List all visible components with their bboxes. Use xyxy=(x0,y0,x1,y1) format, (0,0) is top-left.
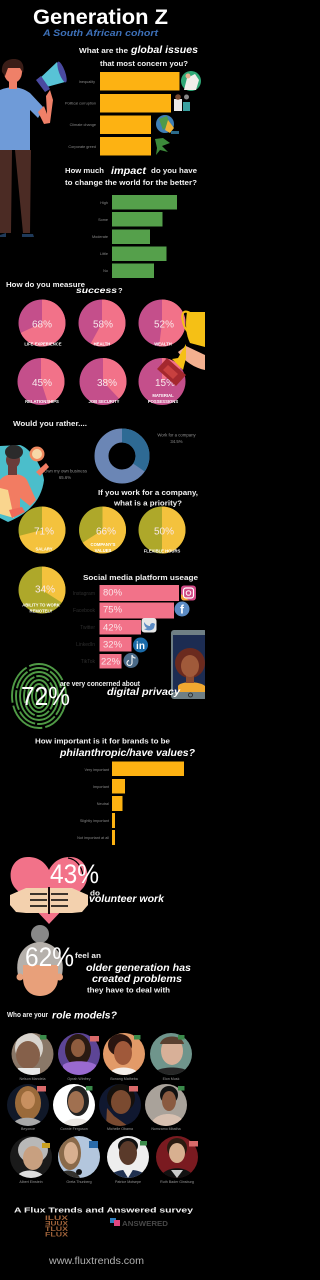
icon: tiktok xyxy=(124,653,138,668)
donut chart: work preference: 34.5% xyxy=(170,439,183,444)
bar chart: social media: Instagram xyxy=(73,591,95,597)
portrait: Ruth Bader Ginsburg xyxy=(156,1136,198,1184)
bar chart: social media: TikTok xyxy=(81,659,95,665)
logo: flux: ILUX xyxy=(45,1216,68,1222)
stat: volunteer work: volunteer work xyxy=(89,894,164,905)
bar chart: brand values: Not important at all xyxy=(77,836,109,840)
pie: company's values: VALUES xyxy=(95,548,112,553)
pie: life experience: 68% xyxy=(32,320,52,330)
pie: ability to work remotely xyxy=(18,566,66,614)
portrait: Nomzamo Mbatha xyxy=(145,1084,187,1131)
illustration: trophy and hand xyxy=(157,312,205,386)
illustration: phone with woman xyxy=(171,630,207,699)
icon: linkedin xyxy=(133,638,148,652)
pie: wealth: 52% xyxy=(154,320,174,330)
portrait: Bonang Matheba xyxy=(103,1033,145,1081)
portrait: Greta Thunberg: Greta Thunberg xyxy=(66,1180,92,1184)
pie: wealth xyxy=(138,299,186,346)
bar chart: global issues: Corporate greed xyxy=(68,145,96,149)
stat: volunteer work: do xyxy=(90,888,100,898)
heading: company priority xyxy=(98,488,198,508)
bar chart: social media xyxy=(73,585,179,668)
icon: facebook: f xyxy=(180,602,185,616)
heading: success: success xyxy=(76,285,117,295)
stat: digital privacy: 72% xyxy=(21,681,70,711)
pie: material possessions: 15% xyxy=(155,378,175,389)
bar chart: social media: Twitter xyxy=(80,625,95,631)
bar chart: global issues: Climate change xyxy=(70,123,96,127)
subtitle: A South African cohort xyxy=(42,28,159,39)
heading: role models xyxy=(7,1010,117,1022)
bar chart: impact: High xyxy=(100,201,108,205)
heading: global issues: that most concern you? xyxy=(100,59,188,68)
pie: ability to work remotely: ABILITY TO WORK xyxy=(22,602,60,608)
heading: role models: role models? xyxy=(52,1010,117,1022)
bar chart: social media: Facebook xyxy=(73,608,95,614)
bar chart: brand values: Neutral xyxy=(97,802,109,806)
pie: relationships: RELATIONSHIPS xyxy=(25,399,59,404)
illustration: woman at laptop xyxy=(0,445,49,522)
portrait: Elon Musk xyxy=(150,1033,192,1081)
stat: digital privacy xyxy=(21,679,180,711)
heading: global issues: What are the xyxy=(79,46,128,55)
bar chart: social media: LinkedIn xyxy=(76,642,95,648)
stat: volunteer work xyxy=(50,859,164,905)
pie: salary: 71% xyxy=(34,526,54,538)
donut chart: work preference: Own my own business xyxy=(44,468,87,474)
stat: older generation: they have to deal with xyxy=(87,986,170,994)
heading: impact xyxy=(65,166,197,187)
portrait: Connie Ferguson: Connie Ferguson xyxy=(60,1127,88,1131)
pie: ability to work remotely: REMOTELY xyxy=(30,608,53,614)
pie: health: 58% xyxy=(93,320,113,330)
bar chart: global issues: Inequality xyxy=(79,80,95,84)
heading: philanthropic brands: philanthropic/have values? xyxy=(59,748,195,759)
heading: impact: do you have xyxy=(151,166,197,175)
bar chart: social media: 75% xyxy=(103,604,123,616)
pie: ability to work remotely: 34% xyxy=(35,584,55,596)
portrait: Nelson Mandela: Nelson Mandela xyxy=(20,1077,45,1081)
illustration: heart and hands xyxy=(10,857,88,924)
heading: global issues xyxy=(79,45,198,68)
icon: instagram xyxy=(181,586,196,600)
donut chart: work preference xyxy=(44,432,197,480)
icon: linkedin: in xyxy=(136,641,145,652)
pie: material possessions: POSSESSIONS xyxy=(148,399,178,404)
pie: health xyxy=(78,300,126,346)
heading: impact: impact xyxy=(111,166,147,177)
portrait: Beyonce: Beyonce xyxy=(21,1127,35,1131)
pie: flexible hours: FLEXIBLE HOURS xyxy=(144,548,180,554)
pie: relationships xyxy=(18,358,64,405)
bar chart: brand values: Very important xyxy=(85,768,110,772)
heading: company priority: If you work for a company, xyxy=(98,488,198,497)
pie: material possessions xyxy=(138,358,186,405)
heading: philanthropic brands: How important is it for brands to be xyxy=(35,736,170,746)
heading: success: How do you measure xyxy=(6,280,85,289)
bar chart: impact: Little xyxy=(100,252,108,256)
portrait: Michelle Obama xyxy=(99,1084,141,1131)
stat: older generation xyxy=(25,942,191,994)
icons: global issues xyxy=(155,71,201,155)
heading: impact: How much xyxy=(65,166,104,175)
pie: flexible hours xyxy=(138,506,186,554)
heading: success xyxy=(6,280,123,295)
portrait: Oprah Winfrey: Oprah Winfrey xyxy=(67,1077,91,1081)
stat: digital privacy: digital privacy xyxy=(107,687,180,698)
pie: salary xyxy=(18,506,66,554)
stat: older generation: 62% xyxy=(25,942,74,972)
stat: older generation: feel an xyxy=(75,951,101,960)
bar chart: social media: 42% xyxy=(103,622,123,634)
stat: digital privacy: are very concerned about xyxy=(60,679,140,688)
portrait: Nomzamo Mbatha: Nomzamo Mbatha xyxy=(151,1127,181,1131)
logo: flux: ƎUUX xyxy=(45,1222,68,1228)
portrait: Albert Einstein xyxy=(10,1136,52,1184)
stat: older generation: older generation has xyxy=(86,963,191,974)
pie: job security xyxy=(80,358,127,405)
portrait: Greta Thunberg xyxy=(58,1136,100,1184)
bar chart: impact: No xyxy=(103,269,108,273)
bar chart: impact: Moderate xyxy=(92,235,108,239)
illustration: older woman xyxy=(16,925,63,996)
pie: wealth: WEALTH xyxy=(154,342,172,346)
heading: global issues: global issues xyxy=(130,45,198,56)
pie: company's values: COMPANY'S xyxy=(91,542,116,547)
bar chart: impact xyxy=(92,195,177,278)
bar chart: impact: Some xyxy=(98,218,108,222)
pie: company's values xyxy=(79,506,126,554)
icon: facebook xyxy=(174,602,190,616)
logo: answered xyxy=(110,1218,169,1228)
portrait: Bonang Matheba: Bonang Matheba xyxy=(110,1077,138,1081)
logo: flux: FLUX xyxy=(45,1232,68,1238)
portrait: Patrice Motsepe xyxy=(107,1136,149,1184)
portrait: Oprah Winfrey xyxy=(58,1033,100,1081)
pie: job security: JOB SECURITY xyxy=(89,399,120,404)
pie: health: HEALTH xyxy=(94,342,110,346)
bar chart: social media: 80% xyxy=(103,588,123,598)
portrait: Beyonce xyxy=(7,1084,49,1131)
stat: older generation: created problems xyxy=(92,974,182,985)
pie: relationships: 45% xyxy=(32,378,52,389)
heading: would you rather: Would you rather.... xyxy=(13,419,87,428)
pie: material possessions: MATERIAL xyxy=(152,393,174,398)
portrait: Elon Musk: Elon Musk xyxy=(163,1077,180,1081)
website link: www.fluxtrends.com xyxy=(48,1256,144,1267)
illustration: person with megaphone xyxy=(0,59,69,237)
bar chart: global issues: Political corruption xyxy=(65,102,96,106)
heading: social media: Social media platform useage xyxy=(83,573,198,582)
pie: salary: SALARY xyxy=(35,546,53,552)
logo: flux: TLUX xyxy=(45,1227,68,1233)
icon: twitter xyxy=(142,618,156,632)
portrait: Michelle Obama: Michelle Obama xyxy=(107,1127,133,1131)
portrait: Albert Einstein: Albert Einstein xyxy=(19,1180,43,1184)
bar chart: social media: 22% xyxy=(101,656,121,668)
donut chart: work preference: 65.6% xyxy=(59,475,71,480)
pie: life experience xyxy=(18,300,66,347)
portrait: Patrice Motsepe: Patrice Motsepe xyxy=(115,1180,141,1184)
logo: answered: ANSWERED xyxy=(122,1219,169,1228)
bar chart: brand values: Slightly important xyxy=(80,819,110,823)
heading: company priority: what is a priority? xyxy=(113,498,182,508)
pie: job security: 38% xyxy=(97,378,117,389)
portrait: Nelson Mandela xyxy=(11,1033,54,1081)
bar chart: brand values xyxy=(77,762,184,845)
portrait: Ruth Bader Ginsburg: Ruth Bader Ginsburg xyxy=(160,1180,194,1184)
bar chart: social media: 32% xyxy=(103,640,123,650)
stat: volunteer work: 43% xyxy=(50,859,99,889)
heading: success: ? xyxy=(118,286,123,295)
logo: flux xyxy=(45,1216,68,1238)
pie: life experience: LIFE EXPERIENCE xyxy=(24,342,62,346)
heading: survey credit: A Flux Trends and Answered survey xyxy=(14,1206,194,1214)
pie: company's values: 66% xyxy=(96,526,116,538)
icon: fingerprint xyxy=(12,664,66,728)
heading: philanthropic brands xyxy=(35,736,195,759)
title: Generation Z xyxy=(33,6,168,29)
bar chart: global issues xyxy=(65,72,180,156)
heading: role models: Who are your xyxy=(7,1010,48,1019)
pie: flexible hours: 50% xyxy=(154,526,174,538)
portrait: Connie Ferguson xyxy=(53,1084,95,1131)
heading: impact: to change the world for the better? xyxy=(65,178,197,187)
bar chart: brand values: Important xyxy=(93,785,110,789)
donut chart: work preference: Work for a company xyxy=(157,432,197,438)
